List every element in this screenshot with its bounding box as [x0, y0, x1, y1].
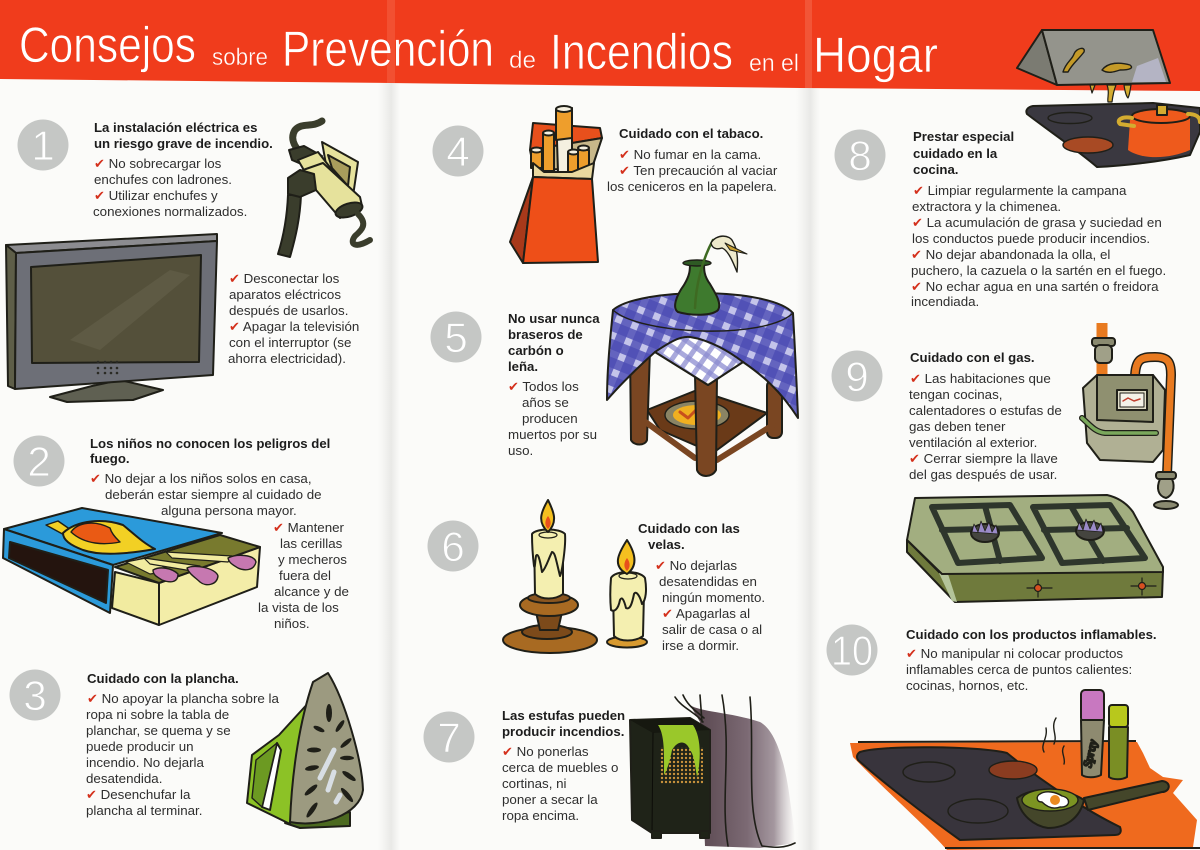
text tip 6: ningún momento.	[662, 590, 765, 605]
number badge 1	[18, 120, 68, 170]
heading tip 4: Cuidado con el tabaco.	[619, 126, 763, 141]
icon: candles	[503, 500, 647, 653]
title: Hogar	[813, 27, 938, 83]
text tip 9: ventilación al exterior.	[909, 435, 1037, 450]
text tip 2: y mecheros	[278, 552, 347, 567]
text tip 3	[86, 691, 279, 818]
panel: tip 5 braziers	[430, 236, 798, 476]
text tip 8: extractora y la chimenea.	[912, 199, 1061, 214]
heading tip 7: producir incendios.	[502, 724, 624, 739]
text tip 5: uso.	[508, 443, 533, 458]
title: de	[509, 47, 536, 74]
text tip 8: ✔ No dejar abandonada la olla, el	[911, 247, 1110, 263]
text tip 1 appliances: ahorra electricidad).	[228, 351, 346, 366]
text tip 1 plugs: enchufes con ladrones.	[94, 172, 232, 187]
icon: cigarette pack	[510, 106, 602, 263]
text tip 1 appliances: con el interruptor (se	[229, 335, 351, 350]
number badge 6	[428, 520, 478, 572]
text tip 2: las cerillas	[280, 536, 343, 551]
text tip 10: cocinas, hornos, etc.	[906, 678, 1028, 693]
icon: gas meter	[1082, 323, 1178, 509]
title: Prevención	[282, 21, 494, 77]
text tip 1 appliances: ✔ Desconectar los	[229, 271, 340, 287]
heading tip 3: Cuidado con la plancha.	[87, 671, 239, 686]
number badge 7	[424, 712, 474, 762]
text tip 1 plugs	[93, 156, 247, 219]
text tip 5: producen	[522, 411, 578, 426]
text tip 5: años se	[522, 395, 569, 410]
text tip 8: puchero, la cazuela o la sartén en el fuego.	[911, 263, 1166, 278]
text tip 9: del gas después de usar.	[909, 467, 1057, 482]
text tip 3: desatendida.	[86, 771, 162, 786]
text tip 2: alcance y de	[274, 584, 349, 599]
text tip 7: ✔ No ponerlas	[502, 744, 589, 760]
text tip 5: muertos por su	[508, 427, 597, 442]
heading tip 6: Cuidado con las	[638, 521, 740, 536]
heading tip 5: carbón o	[508, 343, 564, 358]
heading tip 2: Los niños no conocen los peligros del	[90, 436, 330, 451]
number badge 2: 2	[27, 438, 51, 485]
heading tip 9: Cuidado con el gas.	[910, 350, 1035, 365]
text tip 6: desatendidas en	[659, 574, 757, 589]
text tip 5	[508, 379, 597, 458]
icon: cooktop with pan and sprays	[850, 690, 1200, 850]
number badge 5: 5	[444, 314, 468, 361]
text tip 7: poner a secar la	[502, 792, 598, 807]
text tip 6	[655, 558, 765, 653]
text tip 8: incendiada.	[911, 294, 979, 309]
text tip 1 appliances: después de usarlos.	[229, 303, 348, 318]
text tip 7: ropa encima.	[502, 808, 579, 823]
text tip 2	[90, 471, 349, 631]
panel: tip 3 iron	[10, 670, 363, 828]
text tip 9: ✔ Cerrar siempre la llave	[909, 451, 1058, 467]
text tip 2: ✔ Mantener	[273, 520, 345, 536]
text tip 6: ✔ Apagarlas al	[662, 606, 750, 622]
title	[19, 17, 938, 83]
title: Incendios	[550, 24, 733, 80]
heading tip 5: braseros de	[508, 327, 583, 342]
icon: television	[6, 234, 217, 402]
text tip 8: ✔ No echar agua en una sartén o freidora	[911, 279, 1159, 295]
panel: tip 10 flammables	[826, 624, 1200, 850]
text tip 3: planchar, se quema y se	[86, 723, 231, 738]
text tip 3: ✔ Desenchufar la	[86, 787, 191, 803]
heading tip 8: cuidado en la	[913, 146, 998, 161]
heading tip 8: cocina.	[913, 162, 958, 177]
text tip 6: ✔ No dejarlas	[655, 558, 737, 574]
text tip 8: ✔ La acumulación de grasa y suciedad en	[912, 215, 1162, 231]
text tip 2: alguna persona mayor.	[161, 503, 297, 518]
text tip 3: plancha al terminar.	[86, 803, 202, 818]
text tip 8: los conductos puede producir incendios.	[912, 231, 1150, 246]
icon: iron	[247, 673, 363, 828]
panel: tip 8 kitchen	[834, 30, 1200, 309]
text tip 9	[909, 371, 1062, 482]
number badge 8: 8	[848, 132, 872, 179]
text tip 6: irse a dormir.	[662, 638, 739, 653]
panel: tip 9 gas	[832, 323, 1178, 602]
text tip 7: cerca de muebles o	[502, 760, 618, 775]
text tip 10	[906, 646, 1132, 693]
icon: matchbox	[3, 508, 260, 625]
text tip 10: ✔ No manipular ni colocar productos	[906, 646, 1123, 662]
text tip 1 appliances	[228, 271, 359, 366]
number badge 9	[832, 350, 882, 402]
text tip 2: fuera del	[279, 568, 331, 583]
number badge 4: 4	[446, 128, 470, 175]
text tip 1 plugs: ✔ Utilizar enchufes y	[94, 188, 218, 204]
panel: tip 6 candles	[428, 500, 765, 653]
icon: gas stove	[907, 495, 1163, 602]
text tip 2: ✔ No dejar a los niños solos en casa,	[90, 471, 312, 487]
text tip 1 appliances: aparatos eléctricos	[229, 287, 341, 302]
text tip 5: ✔ Todos los	[508, 379, 579, 395]
heading tip 5: leña.	[508, 359, 538, 374]
heading tip 6: velas.	[648, 537, 685, 552]
heading tip 8: Prestar especial	[913, 129, 1014, 144]
heading tip 7: Las estufas pueden	[502, 708, 625, 723]
text tip 3: ✔ No apoyar la plancha sobre la	[87, 691, 279, 707]
heading tip 10: Cuidado con los productos inflamables.	[906, 627, 1157, 642]
text tip 4: los ceniceros en la papelera.	[607, 179, 777, 194]
text tip 1 appliances: ✔ Apagar la televisión	[229, 319, 359, 335]
title: en el	[749, 50, 799, 77]
number badge 6: 6	[441, 523, 465, 570]
text tip 9: ✔ Las habitaciones que	[910, 371, 1051, 387]
header banner	[0, 0, 1200, 91]
text tip 1 plugs: conexiones normalizados.	[93, 204, 247, 219]
panel: tip 7 heaters	[424, 695, 796, 848]
text tip 2: deberán estar siempre al cuidado de	[105, 487, 322, 502]
number badge 9: 9	[845, 353, 869, 400]
number badge 4	[432, 126, 484, 176]
text tip 3: ropa ni sobre la tabla de	[86, 707, 229, 722]
text tip 9: tengan cocinas,	[909, 387, 1002, 402]
number badge 7: 7	[437, 714, 461, 761]
icon: extractor hood	[1017, 30, 1170, 102]
text tip 4: ✔ Ten precaución al vaciar	[619, 163, 778, 179]
number badge 2	[14, 436, 64, 486]
icon: cooktop with pan and sprays: Spray	[1080, 738, 1100, 769]
heading tip 1: La instalación eléctrica es	[94, 120, 257, 135]
panel: tip 1 electrical	[6, 120, 370, 402]
icon: table with brazier	[607, 236, 798, 476]
text tip 9: gas deben tener	[909, 419, 1006, 434]
heading tip 1: un riesgo grave de incendio.	[94, 136, 273, 151]
number badge 8	[834, 130, 886, 180]
heading tip 2: fuego.	[90, 451, 130, 466]
icon: heater and curtain	[630, 695, 796, 848]
text tip 10: inflamables cerca de puntos calientes:	[906, 662, 1132, 677]
number badge 3	[10, 670, 60, 720]
text tip 8	[911, 183, 1166, 309]
text tip 3: puede producir un	[86, 739, 194, 754]
icon: plug socket	[278, 121, 370, 257]
text tip 7	[502, 744, 618, 823]
title: sobre	[212, 44, 268, 71]
text tip 6: salir de casa o al	[662, 622, 762, 637]
number badge 3: 3	[23, 672, 47, 719]
icon: cooktop with pot	[1026, 103, 1200, 167]
number badge 5	[430, 312, 482, 362]
text tip 8: ✔ Limpiar regularmente la campana	[913, 183, 1127, 199]
text tip 2: la vista de los	[258, 600, 339, 615]
panel: tip 4 tobacco	[432, 106, 778, 263]
text tip 4	[607, 147, 778, 194]
title: Consejos	[19, 17, 196, 73]
text tip 1 plugs: ✔ No sobrecargar los	[94, 156, 222, 172]
text tip 9: calentadores o estufas de	[909, 403, 1062, 418]
panel: tip 2 children	[3, 436, 349, 631]
heading tip 5: No usar nunca	[508, 311, 600, 326]
text tip 2: niños.	[274, 616, 310, 631]
number badge 10: 10	[831, 627, 873, 674]
number badge 1: 1	[31, 122, 55, 169]
text tip 7: cortinas, ni	[502, 776, 567, 791]
text tip 3: incendio. No dejarla	[86, 755, 205, 770]
text tip 4: ✔ No fumar en la cama.	[619, 147, 761, 163]
